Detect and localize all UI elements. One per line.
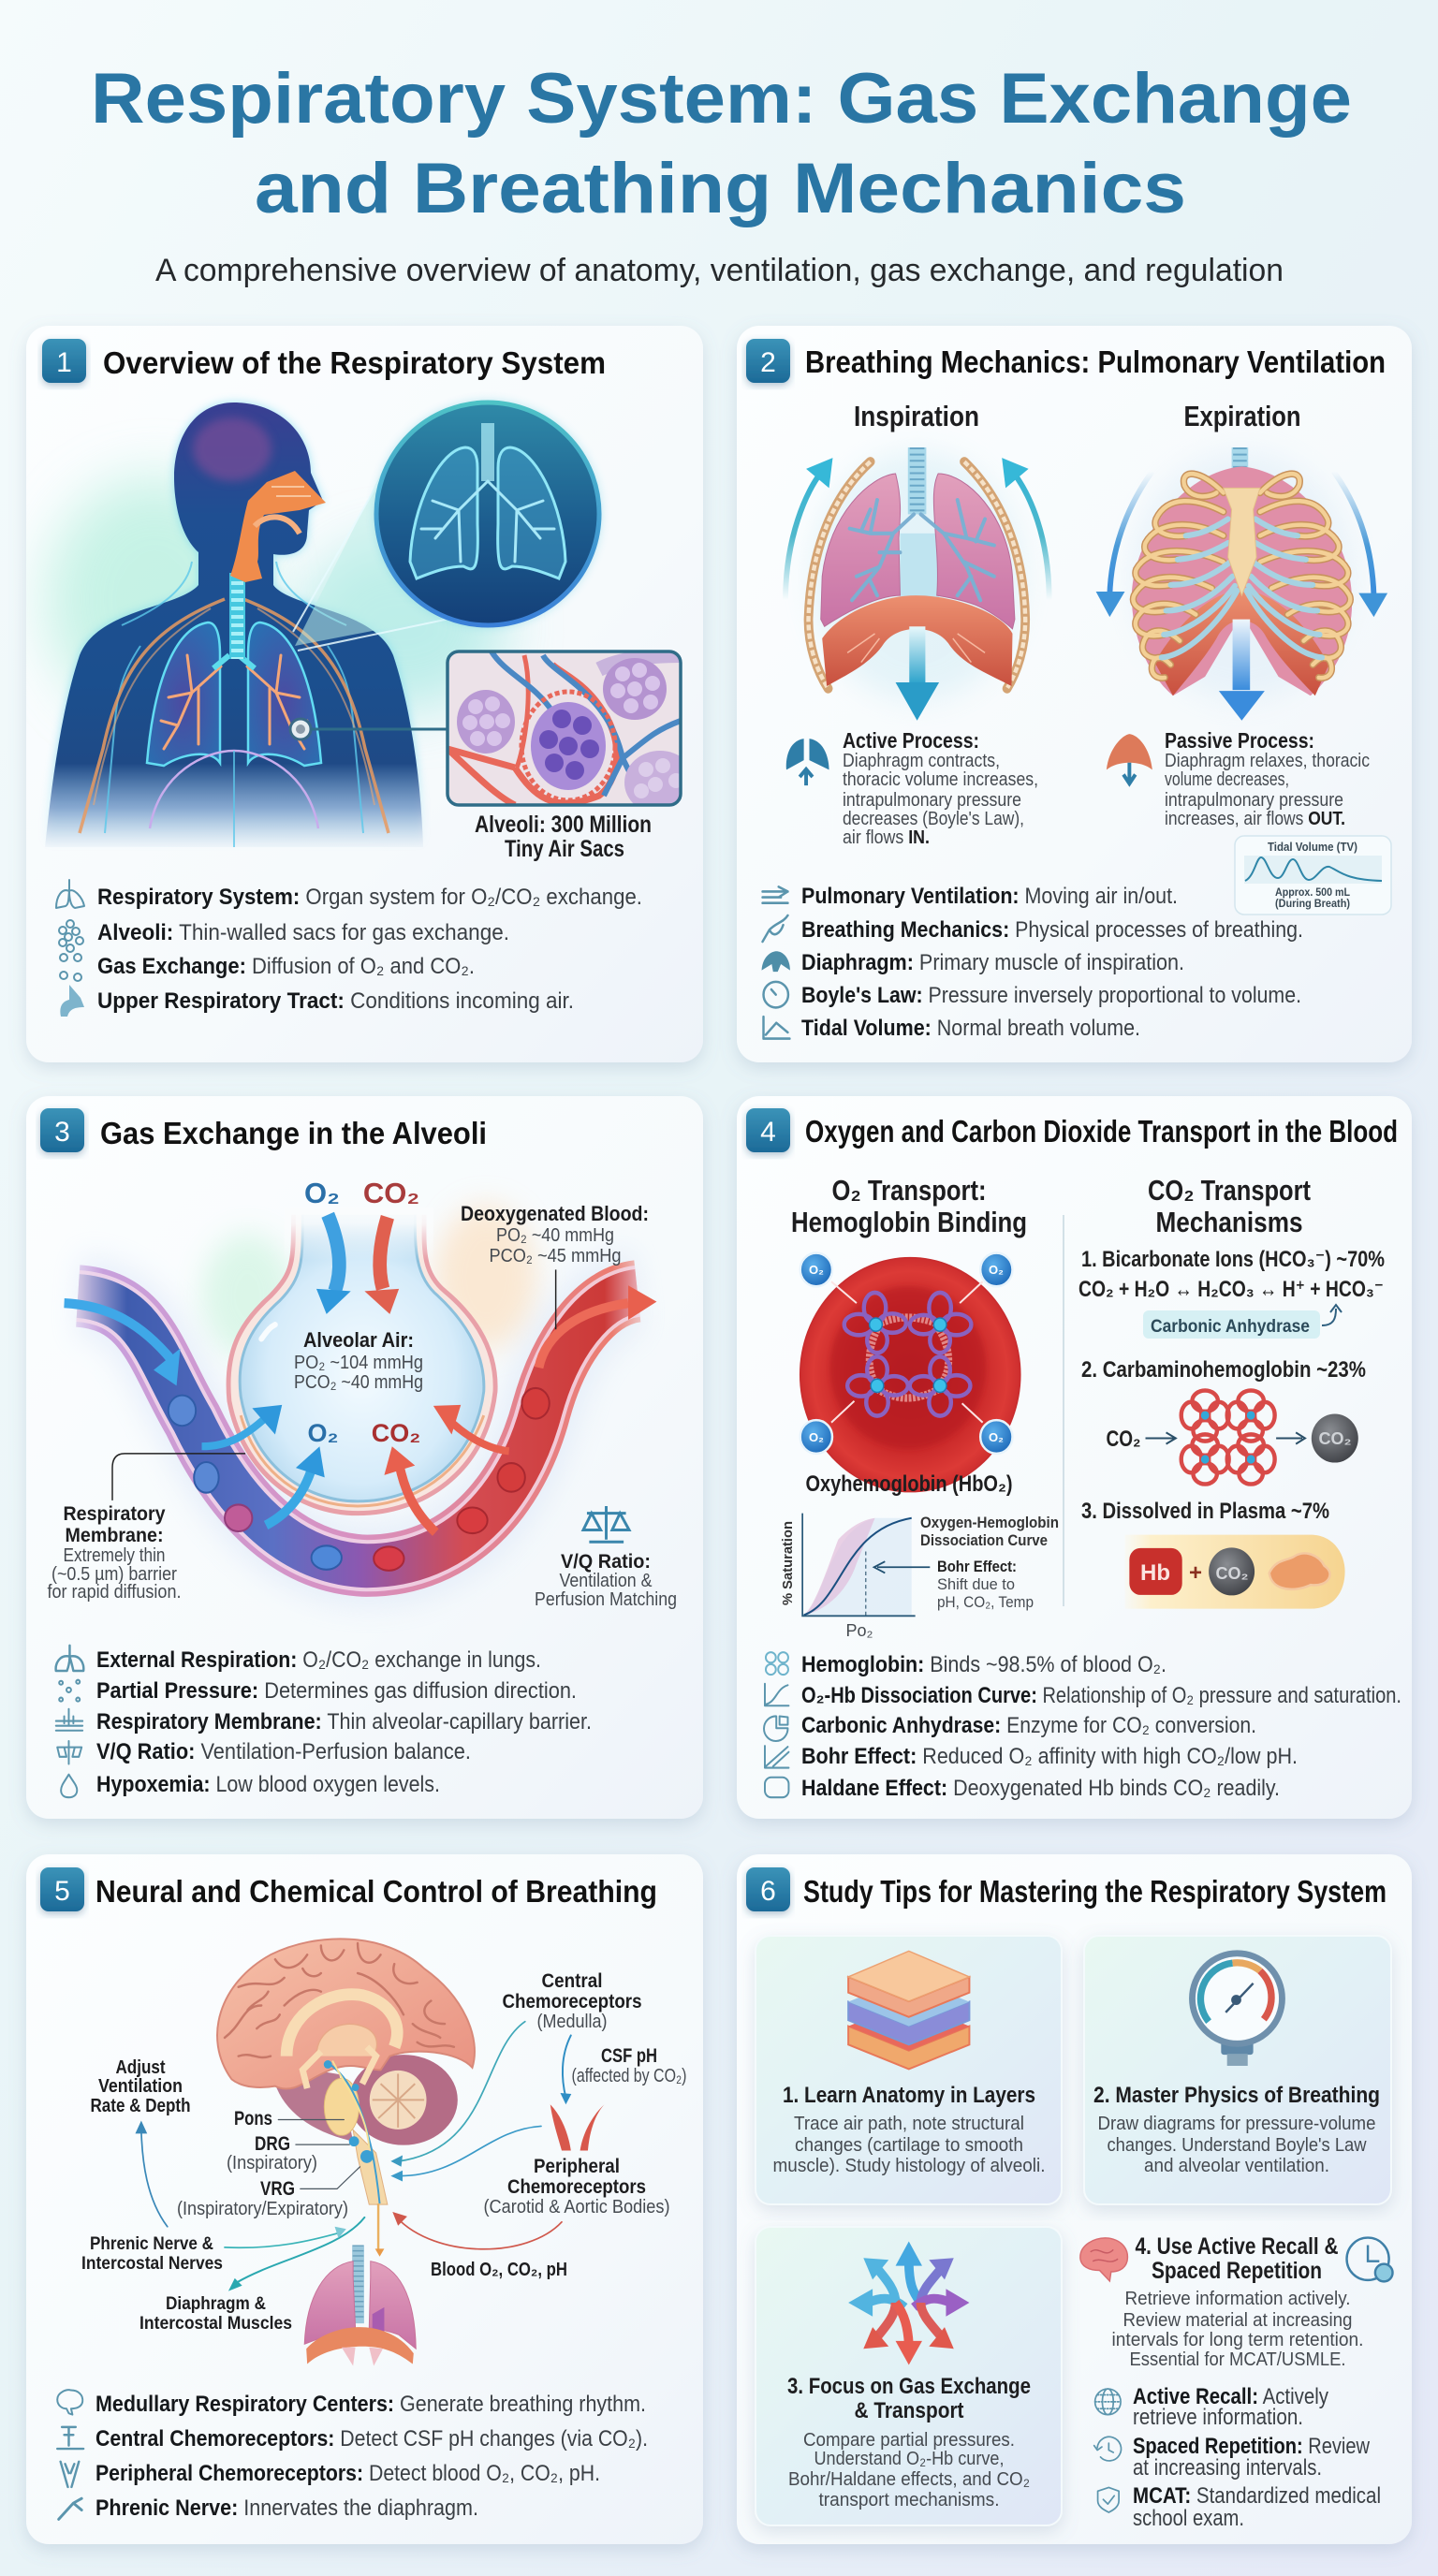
tip: active recall and spaced repetition: Spaced Repetition: [1152, 2258, 1322, 2284]
icon: passive process diaphragm: [1107, 734, 1152, 783]
icon: membrane: [56, 1709, 82, 1731]
text: active process: Diaphragm contracts,: [843, 751, 1000, 771]
icon: nerve: [59, 2498, 81, 2519]
step 2: carbaminohemoglobin: CO₂: [1318, 1429, 1352, 1448]
tip: active recall and spaced repetition: Retrieve information actively.: [1125, 2289, 1350, 2309]
term: respiratory membrane: Respiratory Membrane: Thin alveolar-capillary barrier.: [96, 1709, 592, 1734]
callout: respiratory membrane: (~0.5 µm) barrier: [51, 1564, 177, 1585]
alveoli inset: [448, 651, 696, 814]
labels: CSF pH: [571, 2045, 687, 2086]
term: boyle's law: Boyle's Law: Pressure inversely proportional to volume.: [801, 983, 1301, 1008]
enzyme pill: [1143, 1310, 1320, 1339]
tip: active recall and spaced repetition: [1080, 2233, 1393, 2370]
subtitle: A comprehensive overview of anatomy, ventilation, gas exchange, and regulation: [155, 253, 1284, 288]
labels: peripheral chemoreceptors: Peripheral: [534, 2156, 620, 2177]
O2 labels on hemoglobin: [809, 1263, 1004, 1444]
label: diaphragm and muscles: Diaphragm &: [166, 2294, 266, 2314]
card: focus on gas exchange: Understand O₂-Hb curve,: [814, 2449, 1004, 2469]
enzyme pill: Carbonic Anhydrase: [1151, 1317, 1310, 1337]
icon: Hb tag: [765, 1778, 788, 1797]
badge 3: [40, 1108, 84, 1152]
term: haldane effect: Haldane Effect: Deoxygenated Hb binds CO₂ readily.: [801, 1776, 1280, 1801]
term: spaced repetition: at increasing intervals.: [1133, 2455, 1322, 2481]
illustration: inspiration lungs: [785, 447, 1049, 721]
term: tidal volume: Tidal Volume: Normal breath volume.: [801, 1016, 1140, 1041]
text: active process: Active Process:: [843, 728, 979, 753]
badge 6: [746, 1867, 790, 1911]
term: peripheral chemoreceptors: Peripheral Chemoreceptors: Detect blood O₂, CO₂, pH.: [95, 2461, 600, 2486]
term: central chemoreceptors: Central Chemoreceptors: Detect CSF pH changes (via CO₂).: [95, 2426, 648, 2452]
labels: central chemoreceptors: Chemoreceptors: [502, 1991, 642, 2012]
chart: tidal volume: Approx. 500 mL: [1275, 887, 1350, 899]
term: diaphragm: Diaphragm: Primary muscle of inspiration.: [801, 950, 1184, 975]
label: blood gases: Blood O₂, CO₂, pH: [431, 2260, 567, 2280]
callout: V/Q ratio: Perfusion Matching: [535, 1589, 677, 1610]
callout: deoxygenated blood: PO₂ ~40 mmHg: [496, 1225, 614, 1246]
term: active recall: retrieve information.: [1133, 2405, 1303, 2430]
heading: O2 transport: [791, 1174, 1027, 1238]
term: alveoli: Alveoli: Thin-walled sacs for gas exchange.: [97, 920, 509, 945]
step 3: dissolved in plasma: +: [1189, 1560, 1202, 1586]
callout: alveolar air: PO₂ ~104 mmHg: [294, 1353, 423, 1373]
labels: peripheral chemoreceptors: Chemoreceptors: [507, 2176, 646, 2198]
labels: CSF pH: CSF pH: [601, 2045, 657, 2067]
icon: dots: [59, 1680, 80, 1702]
callout: respiratory membrane: Respiratory: [64, 1503, 166, 1525]
step 3: dissolved in plasma: 3. Dissolved in Plasma ~7%: [1081, 1499, 1329, 1524]
alveoli caption: Tiny Air Sacs: [505, 836, 624, 862]
icon: lungs: [56, 1646, 83, 1671]
label: adjust ventilation: Adjust: [116, 2057, 166, 2078]
icon: clock arrow: [1094, 2437, 1122, 2461]
label: O2 in: O₂: [304, 1177, 340, 1209]
badge 4: 4: [760, 1117, 776, 1148]
text: passive process: volume decreases,: [1165, 769, 1289, 790]
card: focus on gas exchange: Bohr/Haldane effects, and CO₂: [788, 2469, 1030, 2490]
term: active recall: Active Recall: Actively: [1133, 2384, 1328, 2409]
icon: balance scale: [583, 1506, 629, 1542]
term: medullary respiratory centers: Medullary Respiratory Centers: Generate breathing rhythm.: [95, 2392, 646, 2417]
callout: V/Q ratio: Ventilation &: [560, 1571, 653, 1591]
heading: CO2 transport: CO₂ Transport: [1148, 1174, 1311, 1207]
chart: oxygen-hemoglobin dissociation curve: % Saturation: [780, 1521, 796, 1605]
term: MCAT: [1098, 2483, 1381, 2531]
callout: V/Q ratio: V/Q Ratio:: [561, 1551, 651, 1573]
icon: volume graph: [764, 1017, 789, 1039]
text: passive process: increases, air flows OUT.: [1165, 809, 1345, 829]
callout: respiratory membrane: Membrane:: [66, 1525, 163, 1546]
illustration: brain and brainstem: [135, 1939, 605, 2365]
label: CO2 lower: CO₂: [372, 1419, 420, 1447]
panel: neural and chemical control of breathing: [26, 1854, 703, 2544]
callout: deoxygenated blood: [461, 1202, 649, 1266]
text: active process: air flows IN.: [843, 827, 930, 848]
card: master physics of breathing: changes. Understand Boyle's Law: [1107, 2135, 1367, 2156]
badge 2: [746, 339, 790, 383]
tip: active recall and spaced repetition: intervals for long term retention.: [1112, 2330, 1363, 2350]
tip: active recall and spaced repetition: Essential for MCAT/USMLE.: [1129, 2349, 1346, 2370]
badge 4: [746, 1108, 790, 1152]
label: phrenic nerve: Phrenic Nerve &: [90, 2234, 213, 2254]
icon: clock: [1347, 2238, 1393, 2281]
term: gas exchange: Gas Exchange: Diffusion of O₂ and CO₂.: [97, 954, 475, 979]
icon: brain: [1080, 2238, 1127, 2281]
icon: lungs: [56, 880, 84, 908]
callout: alveolar air: PCO₂ ~40 mmHg: [294, 1372, 423, 1393]
badge 5: [40, 1867, 84, 1911]
card: focus on gas exchange: 3. Focus on Gas Exchange: [787, 2374, 1031, 2399]
labels: central chemoreceptors: Central: [541, 1970, 603, 1992]
labels: central chemoreceptors: [502, 1970, 642, 2032]
tip: active recall and spaced repetition: Review material at increasing: [1123, 2310, 1352, 2331]
callout beam and lung inset: [293, 401, 601, 651]
term: respiratory system: Respiratory System: Organ system for O₂/CO₂ exchange.: [97, 885, 642, 910]
labels: brainstem centers: Pons: [234, 2108, 272, 2130]
heading 3: Gas Exchange in the Alveoli: [100, 1116, 487, 1150]
labels: brainstem centers: (Inspiratory/Expiratory): [177, 2199, 348, 2219]
text: passive process: Diaphragm relaxes, thoracic: [1165, 751, 1370, 771]
chart: oxygen-hemoglobin dissociation curve: pH, CO₂, Temp: [937, 1593, 1034, 1611]
alveoli caption: Alveoli: 300 Million: [475, 812, 652, 838]
step 2: carbaminohemoglobin: 2. Carbaminohemoglobin ~23%: [1081, 1357, 1366, 1383]
icon: drop: [61, 1775, 77, 1797]
label: diaphragm and muscles: Intercostal Muscles: [139, 2314, 292, 2334]
text: active process: decreases (Boyle's Law),: [843, 809, 1024, 829]
tip: active recall and spaced repetition: 4. Use Active Recall &: [1135, 2233, 1339, 2260]
labels: brainstem centers: [177, 2108, 348, 2219]
chart: oxygen-hemoglobin dissociation curve: [780, 1514, 1059, 1640]
chart: oxygen-hemoglobin dissociation curve: Oxygen-Hemoglobin: [920, 1514, 1059, 1531]
text: passive process: intrapulmonary pressure: [1165, 790, 1343, 811]
icon: balance: [57, 1741, 81, 1764]
text: passive process: [1165, 728, 1370, 829]
step 1: bicarbonate ions: 1. Bicarbonate Ions (HCO₃⁻) ~70%: [1081, 1247, 1385, 1272]
chart: tidal volume: Tidal Volume (TV): [1268, 840, 1357, 854]
term: alveoli: [59, 920, 509, 952]
icon: shield: [1098, 2487, 1119, 2512]
card: learn anatomy in layers: changes (cartilage to smooth: [795, 2135, 1023, 2156]
step 3: dissolved in plasma: CO₂: [1215, 1564, 1249, 1583]
term: phrenic nerve: Phrenic Nerve: Innervates the diaphragm.: [95, 2496, 478, 2521]
card: learn anatomy in layers: Trace air path, note structural: [794, 2114, 1024, 2134]
title: [91, 59, 1352, 228]
icon: alveoli: [59, 920, 83, 952]
illustration: human torso with airway: [45, 402, 506, 847]
term: spaced repetition: Spaced Repetition: Review: [1133, 2434, 1371, 2459]
icon: gas molecules: [60, 954, 81, 981]
step 1: bicarbonate ions: [1078, 1247, 1385, 1339]
panel: overview of the respiratory system: [26, 326, 703, 1062]
heading 5: Neural and Chemical Control of Breathing: [95, 1874, 657, 1909]
badge 1: [42, 339, 86, 383]
icon: diaphragm: [762, 951, 790, 972]
icon: air flow: [763, 886, 787, 903]
step 3: dissolved in plasma: [1081, 1499, 1345, 1609]
term: partial pressure: Partial Pressure: Determines gas diffusion direction.: [96, 1678, 577, 1704]
icon: diverging arrows: [848, 2242, 969, 2364]
icon: carotid: [61, 2462, 79, 2487]
callout: respiratory membrane: for rapid diffusion.: [47, 1582, 182, 1603]
text: active process: thoracic volume increases,: [843, 769, 1038, 790]
term: pulmonary ventilation: Pulmonary Ventilation: Moving air in/out.: [801, 884, 1178, 909]
term: spaced repetition: [1094, 2434, 1371, 2481]
illustration: red blood cell with hemoglobin: [800, 1253, 1020, 1492]
callout: V/Q ratio: [535, 1551, 677, 1610]
label: adjust ventilation: Rate & Depth: [90, 2096, 191, 2116]
badge 3: 3: [54, 1117, 70, 1148]
labels: brainstem centers: (Inspiratory): [227, 2153, 317, 2174]
labels: peripheral chemoreceptors: (Carotid & Aortic Bodies): [483, 2197, 670, 2217]
alveoli caption: [475, 812, 652, 862]
card: master physics of breathing: Draw diagrams for pressure-volume: [1097, 2114, 1376, 2134]
icon: pressure gauge: [1192, 1954, 1282, 2066]
heading: O2 transport: Hemoglobin Binding: [791, 1206, 1027, 1238]
callout: alveolar air: [294, 1328, 423, 1393]
chart: tidal volume: (During Breath): [1275, 899, 1350, 910]
label: phrenic nerve: [81, 2234, 223, 2274]
title: Respiratory System: Gas Exchange: [91, 59, 1352, 139]
icon: curve: [765, 1684, 788, 1705]
card: master physics of breathing: [1084, 1936, 1391, 2204]
heading: O2 transport: O₂ Transport:: [831, 1174, 987, 1207]
label: O2 lower: O₂: [307, 1419, 339, 1447]
chart: oxygen-hemoglobin dissociation curve: Bohr Effect:: [937, 1558, 1017, 1575]
icon: shifted curve: [765, 1746, 788, 1768]
term: hypoxemia: Hypoxemia: Low blood oxygen levels.: [96, 1772, 440, 1797]
label: adjust ventilation: Ventilation: [98, 2076, 183, 2097]
card: focus on gas exchange: [756, 2227, 1062, 2525]
heading 1: Overview of the Respiratory System: [103, 345, 606, 380]
badge 2: 2: [760, 347, 776, 378]
text: passive process: Passive Process:: [1165, 728, 1314, 753]
label: phrenic nerve: Intercostal Nerves: [81, 2254, 223, 2274]
card: learn anatomy in layers: 1. Learn Anatomy in Layers: [783, 2083, 1035, 2108]
panel: gas exchange in the alveoli: [26, 1096, 703, 1819]
O2 labels on hemoglobin: O₂: [989, 1263, 1004, 1277]
icon: gauge: [764, 982, 788, 1007]
icon: hemoglobin: [766, 1652, 788, 1675]
icon: airway: [60, 985, 84, 1017]
icon: anatomy layers: [848, 1951, 969, 2069]
card: focus on gas exchange: Compare partial pressures.: [803, 2430, 1015, 2451]
heading: CO2 transport: [1148, 1174, 1311, 1238]
icon: enzyme: [764, 1716, 787, 1741]
card: master physics of breathing: and alveolar ventilation.: [1144, 2156, 1329, 2176]
label: adjust ventilation: [90, 2057, 191, 2116]
label: oxyhemoglobin: Oxyhemoglobin (HbO₂): [805, 1471, 1013, 1497]
callout: respiratory membrane: Extremely thin: [64, 1545, 165, 1566]
O2 labels on hemoglobin: O₂: [989, 1430, 1004, 1444]
label: CO2 out: CO₂: [363, 1177, 419, 1209]
O2 labels on hemoglobin: O₂: [809, 1263, 824, 1277]
panel: oxygen and carbon dioxide transport: [737, 1096, 1412, 1819]
icon: globe: [1095, 2389, 1121, 2415]
term: V/Q ratio: V/Q Ratio: Ventilation-Perfusion balance.: [96, 1739, 471, 1764]
labels: peripheral chemoreceptors: [483, 2156, 670, 2217]
term: upper respiratory tract: Upper Respiratory Tract: Conditions incoming air.: [97, 988, 574, 1014]
badge 1: 1: [56, 347, 72, 378]
card: focus on gas exchange: & Transport: [854, 2398, 964, 2423]
labels: CSF pH: (affected by CO₂): [571, 2066, 687, 2086]
card: master physics of breathing: 2. Master Physics of Breathing: [1093, 2083, 1380, 2108]
term: active recall: [1095, 2384, 1328, 2430]
text: active process: intrapulmonary pressure: [843, 790, 1021, 811]
text: active process: [843, 728, 1038, 848]
chart: oxygen-hemoglobin dissociation curve: Dissociation Curve: [920, 1531, 1048, 1549]
step 3: dissolved in plasma: Hb: [1140, 1560, 1170, 1586]
card: learn anatomy in layers: muscle). Study histology of alveoli.: [773, 2156, 1045, 2176]
badge 5: 5: [54, 1876, 70, 1907]
card: learn anatomy in layers: [756, 1936, 1062, 2204]
step 2: carbaminohemoglobin: CO₂: [1107, 1427, 1140, 1452]
illustration: capillary and alveolus: [65, 1206, 656, 1571]
illustration: expiration ribcage: [1096, 447, 1387, 721]
labels: brainstem centers: DRG: [255, 2133, 290, 2155]
callout: deoxygenated blood: PCO₂ ~45 mmHg: [489, 1246, 622, 1266]
icon: brain: [57, 2390, 82, 2415]
labels: central chemoreceptors: (Medulla): [537, 2012, 607, 2032]
term: carbonic anhydrase: Carbonic Anhydrase: Enzyme for CO₂ conversion.: [801, 1713, 1256, 1738]
callout: respiratory membrane: [47, 1503, 182, 1603]
term: breathing mechanics: Breathing Mechanics: Physical processes of breathing.: [801, 917, 1303, 943]
term: bohr effect: Bohr Effect: Reduced O₂ affinity with high CO₂/low pH.: [801, 1744, 1298, 1769]
term: MCAT: MCAT: Standardized medical: [1133, 2483, 1381, 2509]
heading: inspiration: Inspiration: [854, 400, 979, 432]
label: diaphragm and muscles: [139, 2294, 292, 2334]
icon: sensor: [57, 2427, 83, 2449]
chart: oxygen-hemoglobin dissociation curve: Po₂: [845, 1621, 873, 1640]
chart: oxygen-hemoglobin dissociation curve: Shift due to: [937, 1575, 1015, 1593]
card: focus on gas exchange: transport mechanisms.: [818, 2490, 1000, 2510]
icon: active process lungs: [786, 729, 829, 785]
step 2: carbaminohemoglobin: [1081, 1357, 1366, 1485]
heading: expiration: Expiration: [1183, 400, 1301, 432]
term: external respiration: External Respiration: O₂/CO₂ exchange in lungs.: [96, 1647, 541, 1673]
chart: tidal volume: [1235, 836, 1391, 915]
badge 6: 6: [760, 1876, 776, 1907]
callout: alveolar air: Alveolar Air:: [303, 1328, 414, 1352]
panel: study tips: [737, 1854, 1412, 2544]
term: MCAT: school exam.: [1133, 2506, 1244, 2531]
title: and Breathing Mechanics: [255, 149, 1186, 228]
icon: muscle: [763, 915, 787, 942]
panel: breathing mechanics: [737, 326, 1412, 1062]
term: hemoglobin: Hemoglobin: Binds ~98.5% of blood O₂.: [801, 1652, 1167, 1677]
O2 labels on hemoglobin: O₂: [809, 1430, 824, 1444]
heading: CO2 transport: Mechanisms: [1155, 1206, 1303, 1238]
labels: brainstem centers: VRG: [260, 2178, 295, 2200]
callout: deoxygenated blood: Deoxygenated Blood:: [461, 1202, 649, 1225]
